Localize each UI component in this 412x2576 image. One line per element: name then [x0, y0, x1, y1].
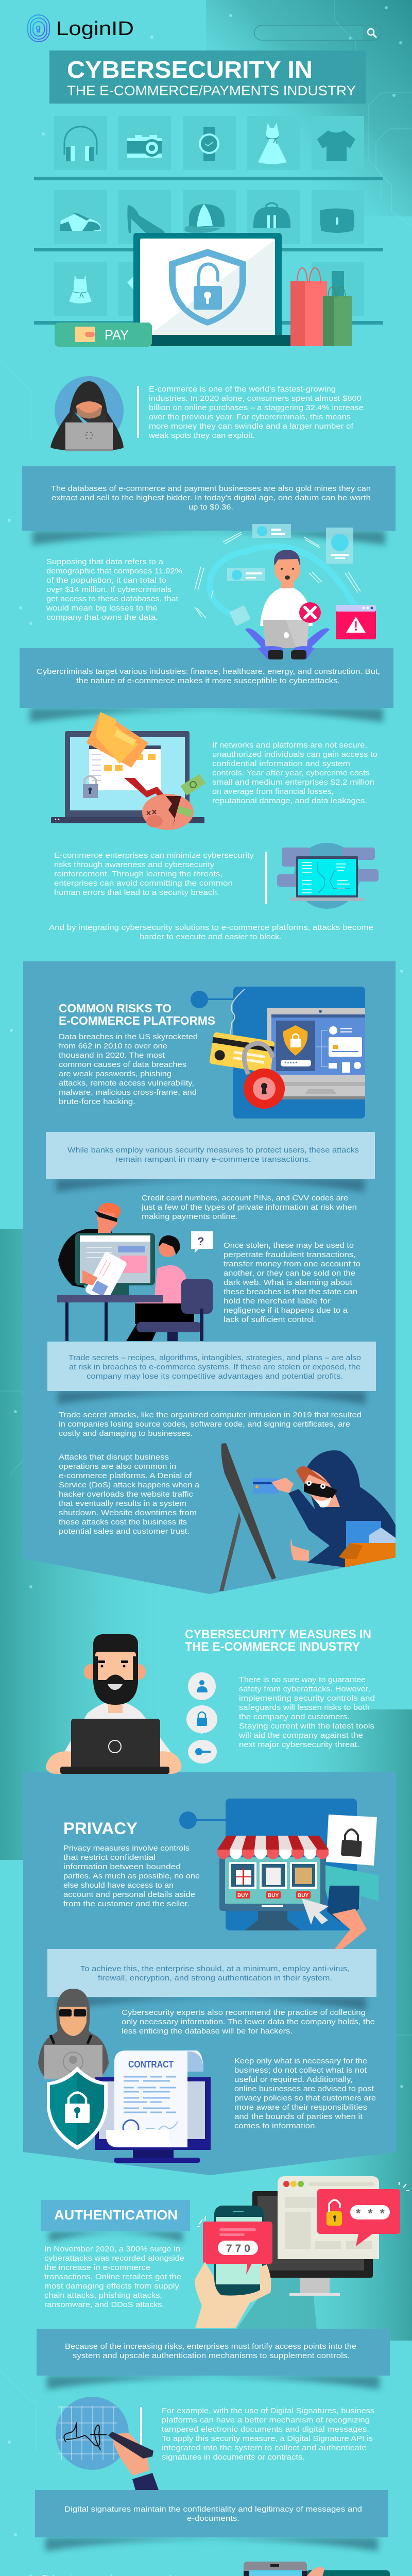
text: once stolen: these breaches is that the state can	[224, 1287, 357, 1296]
text: digital signatures: For example, with the use of Digital Signatures, business	[162, 2406, 374, 2415]
small device	[229, 605, 251, 626]
divider and text: e-commerce growth: over the previous year. For cybercriminals, this means	[149, 413, 351, 421]
text: unauthorized access: controls. Year after year, cybercrime costs	[212, 769, 370, 777]
icon: tank top	[69, 275, 92, 303]
text: trade secret attacks	[59, 1411, 362, 1438]
text: authentication surge: cyberattacks was recorded alongside	[44, 2254, 184, 2263]
illustration: online store with lock sign	[179, 1799, 379, 1949]
text: data value: get access to these databases, that	[46, 595, 179, 603]
data card	[227, 568, 265, 581]
heading: authentication	[41, 2200, 190, 2242]
text: authentication surge: most damaging effects from supply	[44, 2282, 180, 2291]
text: once stolen	[224, 1241, 360, 1324]
text: minimize risk: reinforcement. Through learning the threats,	[54, 870, 222, 878]
illustration: hacker, shield and contract	[38, 1989, 211, 2163]
text: keep only what is necessary	[234, 2057, 376, 2130]
callout: trade secrets: at risk in breaches to e-commerce systems. If these are stolen or exposed, the	[69, 1363, 360, 1371]
icon: sneaker	[60, 213, 101, 231]
callout: trade secrets: Trade secrets – recipes, algorithms, intangibles, strategies, and plans – are also	[68, 1353, 361, 1362]
illustration: stolen folder and broken piggy bank	[51, 712, 205, 830]
monitor	[95, 2077, 211, 2163]
logo wordmark: LoginID	[56, 18, 134, 40]
text: once stolen: Once stolen, these may be used to	[224, 1241, 354, 1250]
icon: fingerprint	[28, 15, 49, 42]
text: keep only what is necessary: comes to information.	[234, 2122, 317, 2130]
callout: anti-virus: firewall, encryption, and strong authentication in their system.	[98, 1974, 332, 1982]
speech bubble: ?	[197, 1235, 204, 1248]
text: collect only necessary: Cybersecurity experts also recommend the practice of collecting	[122, 2008, 366, 2017]
credit card	[306, 2570, 390, 2576]
text: once stolen: another, or they can be sold on the	[224, 1269, 355, 1278]
heading: common risks: COMMON RISKS TO	[59, 1002, 171, 1015]
panel: fortify access points	[37, 2329, 390, 2389]
icon: folder	[87, 712, 148, 768]
title: CYBERSECURITY IN	[67, 56, 313, 83]
button: pay	[55, 323, 152, 347]
shop shelves	[34, 116, 383, 325]
monitor	[75, 1233, 155, 1296]
text: collect only necessary: less enticing the database will be for hackers.	[122, 2027, 293, 2036]
divider and text: e-commerce growth: industries. In 2020 alone, consumers spent almost $800	[149, 394, 362, 403]
monitor	[267, 1008, 365, 1099]
text: unauthorized access	[212, 741, 377, 805]
text: no sure way: next major cybersecurity threat.	[239, 1740, 359, 1749]
text: no sure way: the company and customers.	[239, 1713, 350, 1721]
person	[245, 550, 330, 659]
illustration: fingerprint payment on phone	[228, 2562, 390, 2576]
text: data value: would mean big losses to the	[46, 604, 158, 613]
divider and text: e-commerce growth: E-commerce is one of the world's fastest-growing	[149, 385, 336, 394]
text: privacy measures: information between bounded	[63, 1862, 181, 1871]
icon: gold shield	[283, 1025, 307, 1056]
text: disruption attacks: potential sales and customer trust.	[59, 1527, 190, 1536]
text: disruption attacks: Attacks that disrupt business	[59, 1453, 169, 1462]
monitor side view	[221, 1443, 276, 1580]
text: once stolen: dark web. What is alarming about	[224, 1278, 353, 1287]
text: disruption attacks: that eventually results in a system	[59, 1499, 186, 1508]
text: minimize risk: human errors that lead to a security breach.	[54, 888, 219, 897]
text: keep only what is necessary: useful or required. Additionally,	[234, 2075, 353, 2084]
text: data breaches: common causes of data breaches	[59, 1060, 186, 1069]
alert bubble with password	[317, 2189, 400, 2246]
text: privacy measures: from the customer and the seller.	[63, 1900, 190, 1908]
text: disruption attacks	[59, 1453, 200, 1536]
icon: shopping bags	[290, 268, 352, 346]
text: digital signatures	[162, 2406, 374, 2462]
text: credit card numbers: just a few of the types of private information at risk when	[141, 1203, 357, 1212]
title: THE E-COMMERCE/PAYMENTS INDUSTRY	[67, 83, 356, 98]
text: disruption attacks: operations are also common in	[59, 1462, 176, 1471]
heading: common risks: E-COMMERCE PLATFORMS	[59, 1014, 215, 1027]
text: once stolen: lack of sufficient control.	[224, 1315, 316, 1324]
text: once stolen: perpetrate fraudulent transactions,	[224, 1250, 356, 1259]
text: minimize risk	[54, 851, 267, 904]
text: keep only what is necessary: more aware of their responsibilities	[234, 2103, 367, 2112]
desk	[57, 1295, 203, 1341]
divider and text: e-commerce growth: billion on online purchases – a staggering 32.4% increase	[149, 403, 364, 412]
icon: ID card	[209, 1032, 275, 1073]
phone	[244, 2562, 307, 2576]
illustration: bearded man with laptop	[46, 1634, 181, 1774]
contract title: CONTRACT	[128, 2059, 174, 2070]
illustration: thief behind monitor	[57, 1203, 213, 1341]
illustration: hooded thief with card	[219, 1443, 396, 1591]
text: data breaches: are weak passwords, phishing	[59, 1070, 171, 1078]
icon: partly hidden item	[127, 275, 135, 292]
callout: trade secrets	[47, 1342, 376, 1404]
text: disruption attacks: shutdown. Website downtimes from	[59, 1509, 197, 1517]
illustration: online store with lock sign: BUY	[237, 1893, 248, 1899]
lock sign	[326, 1815, 377, 1866]
illustration: hacker with laptop	[50, 376, 124, 451]
illustration: digital signature	[56, 2397, 159, 2490]
panel: signature legitimacy: e-documents.	[187, 2514, 239, 2523]
text: minimize risk: risks through awareness and cybersecurity	[54, 860, 215, 869]
icon: user bubble	[188, 1672, 216, 1700]
callout: banks: While banks employ various security measures to protect users, these attacks	[67, 1146, 359, 1155]
illustration: two-factor authentication	[195, 2176, 409, 2329]
panel: signature legitimacy	[35, 2490, 388, 2551]
text: integrating solutions: harder to execute and easier to block.	[140, 933, 282, 941]
search bar	[254, 25, 381, 40]
text: data breaches: from 662 in 2010 to over one	[59, 1042, 167, 1050]
icon: watch	[199, 127, 219, 161]
logo: LoginID header	[28, 15, 134, 42]
text: data value: demographic that composes 11.92%	[46, 567, 182, 575]
text: no sure way: There is no sure way to guarantee	[239, 1675, 366, 1684]
monitor	[252, 2191, 373, 2296]
text: no sure way: safety from cyberattacks. However,	[239, 1685, 370, 1693]
panel: privacy	[23, 1772, 396, 2175]
text: disruption attacks: e-commerce platforms. A Denial of	[59, 1471, 192, 1480]
text: trade secret attacks: costly and damaging to businesses.	[59, 1429, 193, 1438]
callout: banks	[46, 1132, 375, 1192]
text: data value: over $14 million. If cybercriminals	[46, 585, 171, 594]
panel: signature legitimacy: Digital signatures maintain the confidentiality and legitimacy of messages and	[64, 2505, 362, 2514]
text: authentication surge: the increase in e-commerce	[44, 2263, 150, 2272]
icon: dollar bill	[181, 774, 205, 795]
illustration: worried user with data cards	[195, 524, 376, 659]
text: unauthorized access: reputational damage, and data leakages.	[212, 796, 367, 805]
icon: headphones	[64, 127, 97, 161]
awning	[217, 1836, 329, 1859]
text: keep only what is necessary: business; do not collect what is not	[234, 2066, 367, 2075]
icon: duffel bag	[253, 203, 290, 228]
text: digital signatures: integrated into the system to collect and authenticate	[162, 2444, 367, 2452]
text: data breaches: Data breaches in the US skyrocketed	[59, 1032, 198, 1041]
panel: databases are gold mines: The databases of e-commerce and payment businesses are also gold mines they can	[51, 484, 371, 493]
heading: cybersecurity measures: THE E-COMMERCE INDUSTRY	[185, 1640, 360, 1654]
text: trade secret attacks: in companies losing source codes, software code, and signing certificates, are	[59, 1420, 350, 1429]
icon: handbag	[320, 208, 354, 233]
divider and text: e-commerce growth	[137, 385, 364, 440]
heading: cybersecurity measures	[185, 1628, 371, 1654]
shield	[47, 2066, 108, 2150]
text: unauthorized access: small and medium enterprises $2.2 million	[212, 778, 374, 787]
shopper	[126, 1235, 194, 1341]
woman	[324, 1865, 379, 1949]
alert bubble with password: ***	[356, 2207, 385, 2221]
text: disruption attacks: these attacks cost the business its	[59, 1518, 187, 1527]
thief	[58, 1203, 121, 1288]
box with files	[339, 1521, 396, 1567]
panel: cybercriminals target industries	[20, 646, 393, 722]
text: data breaches: attacks, remote access vulnerability,	[59, 1079, 194, 1088]
icon: key bubble	[188, 1740, 217, 1764]
callout: banks: remain rampant in many e-commerce transactions.	[115, 1155, 311, 1164]
panel: databases are gold mines: up to $0.36.	[188, 503, 233, 512]
hoodie	[288, 1450, 396, 1567]
data card	[326, 528, 353, 564]
icon: camera	[127, 135, 162, 158]
icon: lock bubble	[186, 1705, 217, 1734]
text: no sure way: will aid the company against the	[238, 1731, 363, 1740]
text: minimize risk: E-commerce enterprises can minimize cybersecurity	[54, 851, 254, 860]
text: data breaches	[59, 1032, 198, 1106]
person's feet over panel	[258, 646, 314, 659]
text: keep only what is necessary: privacy policies so that customers are	[234, 2094, 376, 2103]
text: collect only necessary	[122, 2008, 375, 2036]
text: digital signatures: platforms can have a better mechanism of recognizing	[162, 2416, 370, 2425]
text: disruption attacks: Service (DoS) attack happens when a	[59, 1481, 200, 1489]
text: credit card numbers	[141, 1194, 357, 1221]
credit card	[253, 1478, 279, 1494]
icon: dress	[258, 123, 287, 164]
text: once stolen: negligence if it happens due to a	[224, 1306, 348, 1315]
fingers	[300, 2567, 324, 2576]
cursor	[302, 1899, 329, 1925]
text: digital signatures: To apply this security measure, a Digital Signature API is	[162, 2434, 373, 2443]
text: credit card numbers: Credit card numbers, account PINs, and CVV codes are	[142, 1194, 348, 1202]
icon: t-shirt	[317, 130, 355, 161]
button: pay: PAY	[105, 327, 129, 343]
storefront	[219, 1857, 325, 1911]
panel: databases are gold mines: extract and sell to the highest bidder. In today's digital age, one datum can be worth	[52, 494, 371, 502]
fishing hook	[230, 989, 245, 1036]
text: digital signatures: signatures in documents or contracts.	[162, 2453, 305, 2462]
text: digital signatures: tampered electronic documents and digital messages.	[162, 2425, 369, 2434]
icon: wallet	[75, 327, 95, 342]
panel: fortify access points: system and upscale authentication mechanisms to supplement controls.	[73, 2351, 350, 2360]
icon: error bubble	[299, 602, 321, 623]
text: no sure way: Staying current with the latest tools	[239, 1722, 374, 1731]
divider and text: e-commerce growth: weak spots they can exploit.	[148, 431, 255, 440]
illustration: online store with lock sign: BUY	[268, 1893, 279, 1899]
divider and text: e-commerce growth: more money they can swindle and a larger number of	[149, 422, 354, 431]
text: data breaches: thousand in 2020. The most	[59, 1051, 165, 1060]
sparks	[197, 2182, 409, 2227]
icon: cap	[184, 204, 225, 233]
illustration: phishing hook and monitor: *****	[284, 1061, 298, 1067]
icon: open padlock	[194, 264, 222, 310]
file window	[89, 745, 161, 790]
text: data breaches: brute-force hacking.	[59, 1097, 135, 1106]
browser window	[278, 2176, 379, 2259]
text: once stolen: transfer money from one account to	[224, 1260, 360, 1268]
panel: common risks	[23, 961, 396, 1594]
stolen card	[84, 1251, 128, 1303]
panel: cybercriminals target industries: Cybercriminals target various industries: finance, healthcare, energy, and construction. But,	[37, 667, 380, 676]
text: authentication surge: transactions. Online retailers got the	[44, 2273, 181, 2281]
callout: trade secrets: company may lose its competitive advantages and potential profits.	[87, 1372, 343, 1381]
hacker	[38, 1989, 109, 2079]
text: privacy measures	[63, 1844, 200, 1908]
text: data value: of the population, it can total to	[46, 576, 166, 585]
text: data breaches: malware, malicious cross-frame, and	[59, 1088, 197, 1097]
text: privacy measures: parties. As much as possible, no one	[63, 1872, 200, 1880]
callout: anti-virus: To achieve this, the enterprise should, at a minimum, employ anti-virus,	[80, 1964, 350, 1973]
text: keep only what is necessary: and the bounds of parties when it	[234, 2112, 363, 2121]
text: data value	[46, 557, 182, 622]
monitor stand	[219, 1512, 241, 1591]
title	[49, 50, 366, 104]
text: authentication surge: In November 2020, a 300% surge in	[44, 2245, 180, 2253]
text: minimize risk: enterprises can avoid committing the common	[54, 879, 233, 888]
text: unauthorized access: unauthorized individuals can gain access to	[212, 750, 377, 759]
illustration: laptop with code	[277, 843, 379, 909]
callout: anti-virus	[47, 1949, 376, 2010]
illustration: phishing hook and monitor	[191, 987, 365, 1118]
text: unauthorized access: If networks and platforms are not secure,	[212, 741, 367, 750]
text: data value: Supposing that data refers to a	[46, 557, 164, 566]
otp bubble	[203, 2222, 272, 2275]
icon: piggy bank	[142, 794, 194, 830]
panel: databases are gold mines	[22, 466, 396, 545]
icon: teal bottle behind bags	[332, 271, 344, 302]
text: keep only what is necessary: Keep only what is necessary for the	[234, 2057, 367, 2065]
speech bubble	[191, 1231, 213, 1253]
heading: privacy: PRIVACY	[63, 1819, 138, 1838]
heading: cybersecurity measures: CYBERSECURITY MEASURES IN	[185, 1628, 371, 1641]
panel: cybercriminals target industries: the nature of e-commerce makes it more susceptible to cyberattacks.	[76, 676, 340, 685]
icon: shield	[169, 249, 246, 326]
text: authentication surge: ransomware, and DDoS attacks.	[44, 2300, 164, 2309]
illustration: online store with lock sign: BUY	[298, 1893, 308, 1899]
text: authentication surge	[44, 2245, 184, 2309]
icon: warning window	[336, 605, 376, 639]
text: integrating solutions	[49, 923, 373, 941]
text: unauthorized access: on average from financial losses,	[212, 787, 334, 796]
text: no sure way	[238, 1675, 375, 1749]
text: unauthorized access: confidential information and system	[212, 759, 350, 768]
text: once stolen: hold the merchant liable for	[224, 1297, 331, 1306]
icon: high heel	[127, 205, 165, 234]
arrow: falling	[124, 778, 175, 810]
hand	[195, 2262, 271, 2328]
heading: authentication: AUTHENTICATION	[54, 2207, 178, 2223]
text: no sure way: safeguards will lessen risks to both	[239, 1703, 370, 1712]
laptop with shield	[133, 233, 296, 346]
icon: open padlock	[244, 1043, 285, 1109]
text: privacy measures: that restrict confidential	[63, 1853, 156, 1862]
text: data value: company that owns the data.	[46, 613, 158, 622]
phone	[214, 2206, 264, 2296]
otp bubble: 770	[226, 2243, 250, 2255]
heading: common risks	[59, 1002, 215, 1027]
contract	[106, 2050, 203, 2147]
chair	[136, 1279, 213, 1341]
text: no sure way: implementing security controls and	[239, 1694, 375, 1703]
text: keep only what is necessary: online businesses are advised to post	[234, 2084, 374, 2093]
text: privacy measures: account and personal details aside	[63, 1890, 195, 1899]
text: trade secret attacks: Trade secret attacks, like the organized computer intrusion in 2019 that resulted	[59, 1411, 362, 1419]
data card	[252, 524, 291, 538]
icon: padlock	[83, 776, 98, 798]
text: authentication surge: chain attacks, phishing attacks,	[44, 2291, 162, 2300]
text: collect only necessary: only necessary information. The fewer data the company holds, the	[122, 2018, 375, 2026]
text: credit card numbers: making payments online.	[142, 1212, 238, 1221]
text: privacy measures: else should have access to an	[63, 1881, 174, 1890]
text: integrating solutions: And by integrating cybersecurity solutions to e-commerce platforms, attacks become	[49, 923, 373, 932]
text: disruption attacks: hacker overloads the website traffic	[59, 1490, 194, 1499]
panel: fortify access points: Because of the increasing risks, enterprises must fortify access points into the	[65, 2342, 356, 2351]
text: privacy measures: Privacy measures involve controls	[63, 1844, 190, 1853]
